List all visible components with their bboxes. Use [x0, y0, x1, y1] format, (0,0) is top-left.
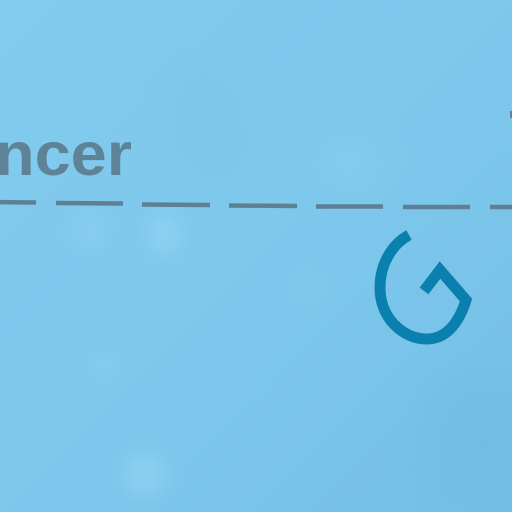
partial mark at right edge [510, 111, 512, 118]
icon: G logo [380, 235, 466, 339]
dashed line [0, 202, 512, 207]
